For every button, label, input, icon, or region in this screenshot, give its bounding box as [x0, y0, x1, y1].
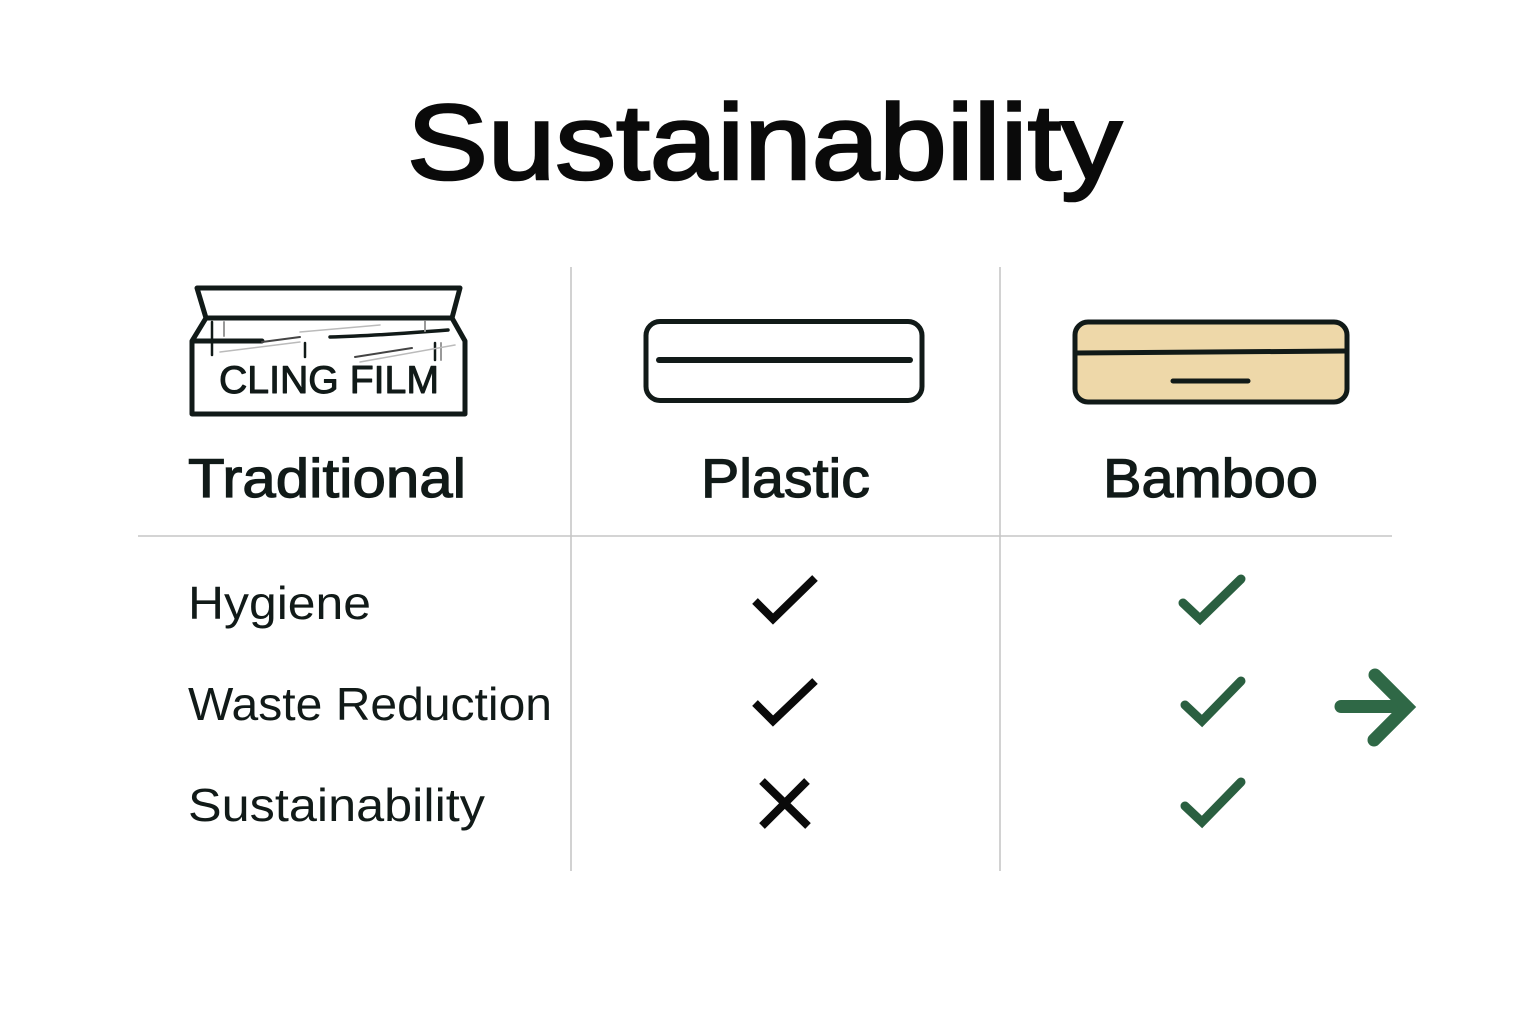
row label: Sustainability: Sustainability — [188, 779, 485, 831]
container handle — [1173, 378, 1248, 384]
icon: bamboo sustainability check — [1185, 782, 1241, 822]
icon: green arrow — [1341, 675, 1407, 740]
row label: Waste Reduction: Waste Reduction — [188, 678, 552, 730]
container seam — [1076, 351, 1346, 353]
container body — [1075, 322, 1347, 402]
title: Sustainability — [407, 82, 1123, 202]
icon: bamboo waste reduction check — [1185, 681, 1241, 721]
icon: plastic sustainability cross — [762, 781, 808, 826]
icon: plastic hygiene check — [755, 578, 815, 619]
heading: Plastic: Plastic — [701, 447, 870, 509]
icon: plastic waste reduction check — [755, 681, 815, 721]
container outline — [646, 322, 922, 400]
icon: bamboo container — [1075, 322, 1347, 402]
icon: bamboo hygiene check — [1183, 579, 1241, 619]
container seam — [659, 357, 910, 363]
box lid — [197, 288, 460, 318]
box label: CLING FILM — [219, 359, 439, 402]
heading: Bamboo: Bamboo — [1103, 447, 1318, 509]
film strands — [212, 321, 455, 362]
icon: cling film box — [192, 288, 465, 414]
icon: plastic container — [646, 322, 922, 400]
box body — [192, 318, 465, 414]
heading: Traditional: Traditional — [188, 447, 466, 509]
row label: Hygiene: Hygiene — [188, 577, 371, 629]
